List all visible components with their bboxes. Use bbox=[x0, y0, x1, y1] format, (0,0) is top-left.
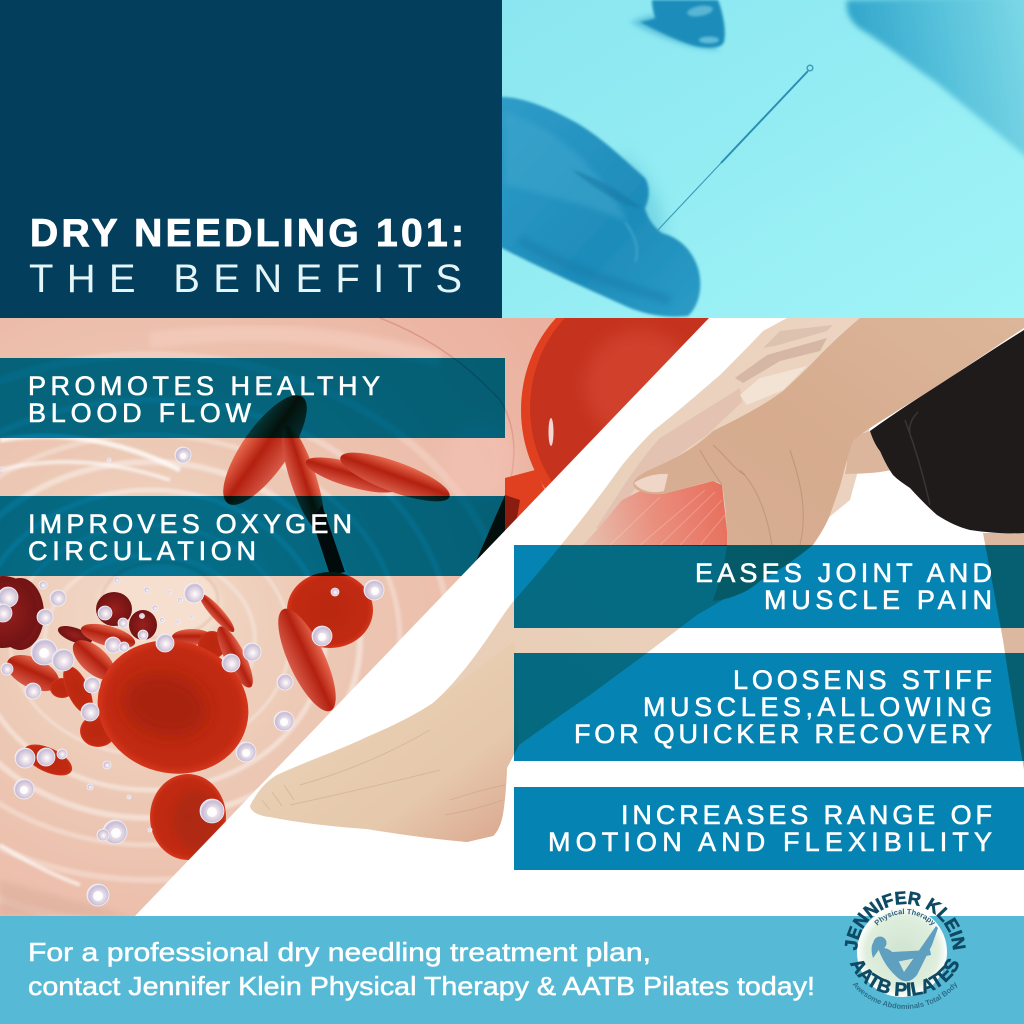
panel: benefit bar blood flow bbox=[0, 358, 505, 438]
text: increases range of motion: INCREASES RANGE OF bbox=[621, 800, 992, 830]
title: DRY NEEDLING 101: bbox=[30, 212, 464, 255]
panel: benefit bar range of motion bbox=[514, 787, 1024, 870]
logo: Jennifer Klein AATB Pilates: JENNIFER KLEIN bbox=[844, 891, 966, 950]
text: eases joint and muscle pain: EASES JOINT AND bbox=[695, 558, 992, 588]
text: loosens stiff muscles bbox=[574, 665, 992, 749]
footer call to action: contact Jennifer Klein Physical Therapy & AATB Pilates today! bbox=[28, 971, 815, 1001]
photo: red blood cells in vessel bbox=[0, 318, 709, 916]
footer band bbox=[0, 916, 1024, 1024]
text: promotes healthy blood flow bbox=[28, 371, 380, 428]
red highlighted calf muscle bbox=[582, 481, 727, 546]
text: eases joint and muscle pain: MUSCLE PAIN bbox=[764, 585, 992, 615]
muscle strands on upper leg bbox=[596, 325, 833, 532]
logo: Jennifer Klein AATB Pilates: Awesome Abdominals Total Body bbox=[852, 982, 958, 1010]
footer call to action bbox=[28, 937, 815, 1001]
text: eases joint and muscle pain bbox=[695, 558, 992, 615]
photo: leg with highlighted calf muscle bbox=[250, 318, 1024, 842]
logo: Jennifer Klein AATB Pilates: Physical Therapy bbox=[874, 908, 936, 926]
text: loosens stiff muscles: LOOSENS STIFF bbox=[733, 665, 992, 695]
black shorts bbox=[870, 330, 1024, 533]
text: promotes healthy blood flow: BLOOD FLOW bbox=[28, 398, 252, 428]
title: THE BENEFITS bbox=[29, 257, 462, 301]
panel: benefit bar joint and muscle pain bbox=[514, 545, 1024, 628]
text: improves oxygen circulation bbox=[28, 509, 352, 566]
text: promotes healthy blood flow: PROMOTES HEALTHY bbox=[28, 371, 380, 401]
text: improves oxygen circulation: CIRCULATION bbox=[28, 536, 256, 566]
text: increases range of motion: MOTION AND FLEXIBILITY bbox=[548, 827, 992, 857]
icon: pilates figure silhouette bbox=[872, 926, 938, 981]
text: improves oxygen circulation: IMPROVES OXYGEN bbox=[28, 509, 352, 539]
panel: benefit bar oxygen bbox=[0, 496, 505, 576]
panel: title background bbox=[0, 0, 502, 318]
text: loosens stiff muscles: FOR QUICKER RECOVERY bbox=[574, 719, 992, 749]
footer call to action: For a professional dry needling treatment plan, bbox=[28, 937, 651, 967]
logo: Jennifer Klein AATB Pilates: AATB PILATES bbox=[850, 958, 959, 996]
text: increases range of motion bbox=[548, 800, 992, 857]
logo: Jennifer Klein AATB Pilates bbox=[844, 891, 966, 1010]
panel: benefit bar stiff muscles bbox=[514, 653, 1024, 761]
hand gripping calf bbox=[633, 318, 1024, 601]
photo: gloved hand inserting needle bbox=[500, 0, 1024, 318]
title bbox=[29, 212, 464, 301]
text: loosens stiff muscles: MUSCLES,ALLOWING bbox=[643, 692, 992, 722]
